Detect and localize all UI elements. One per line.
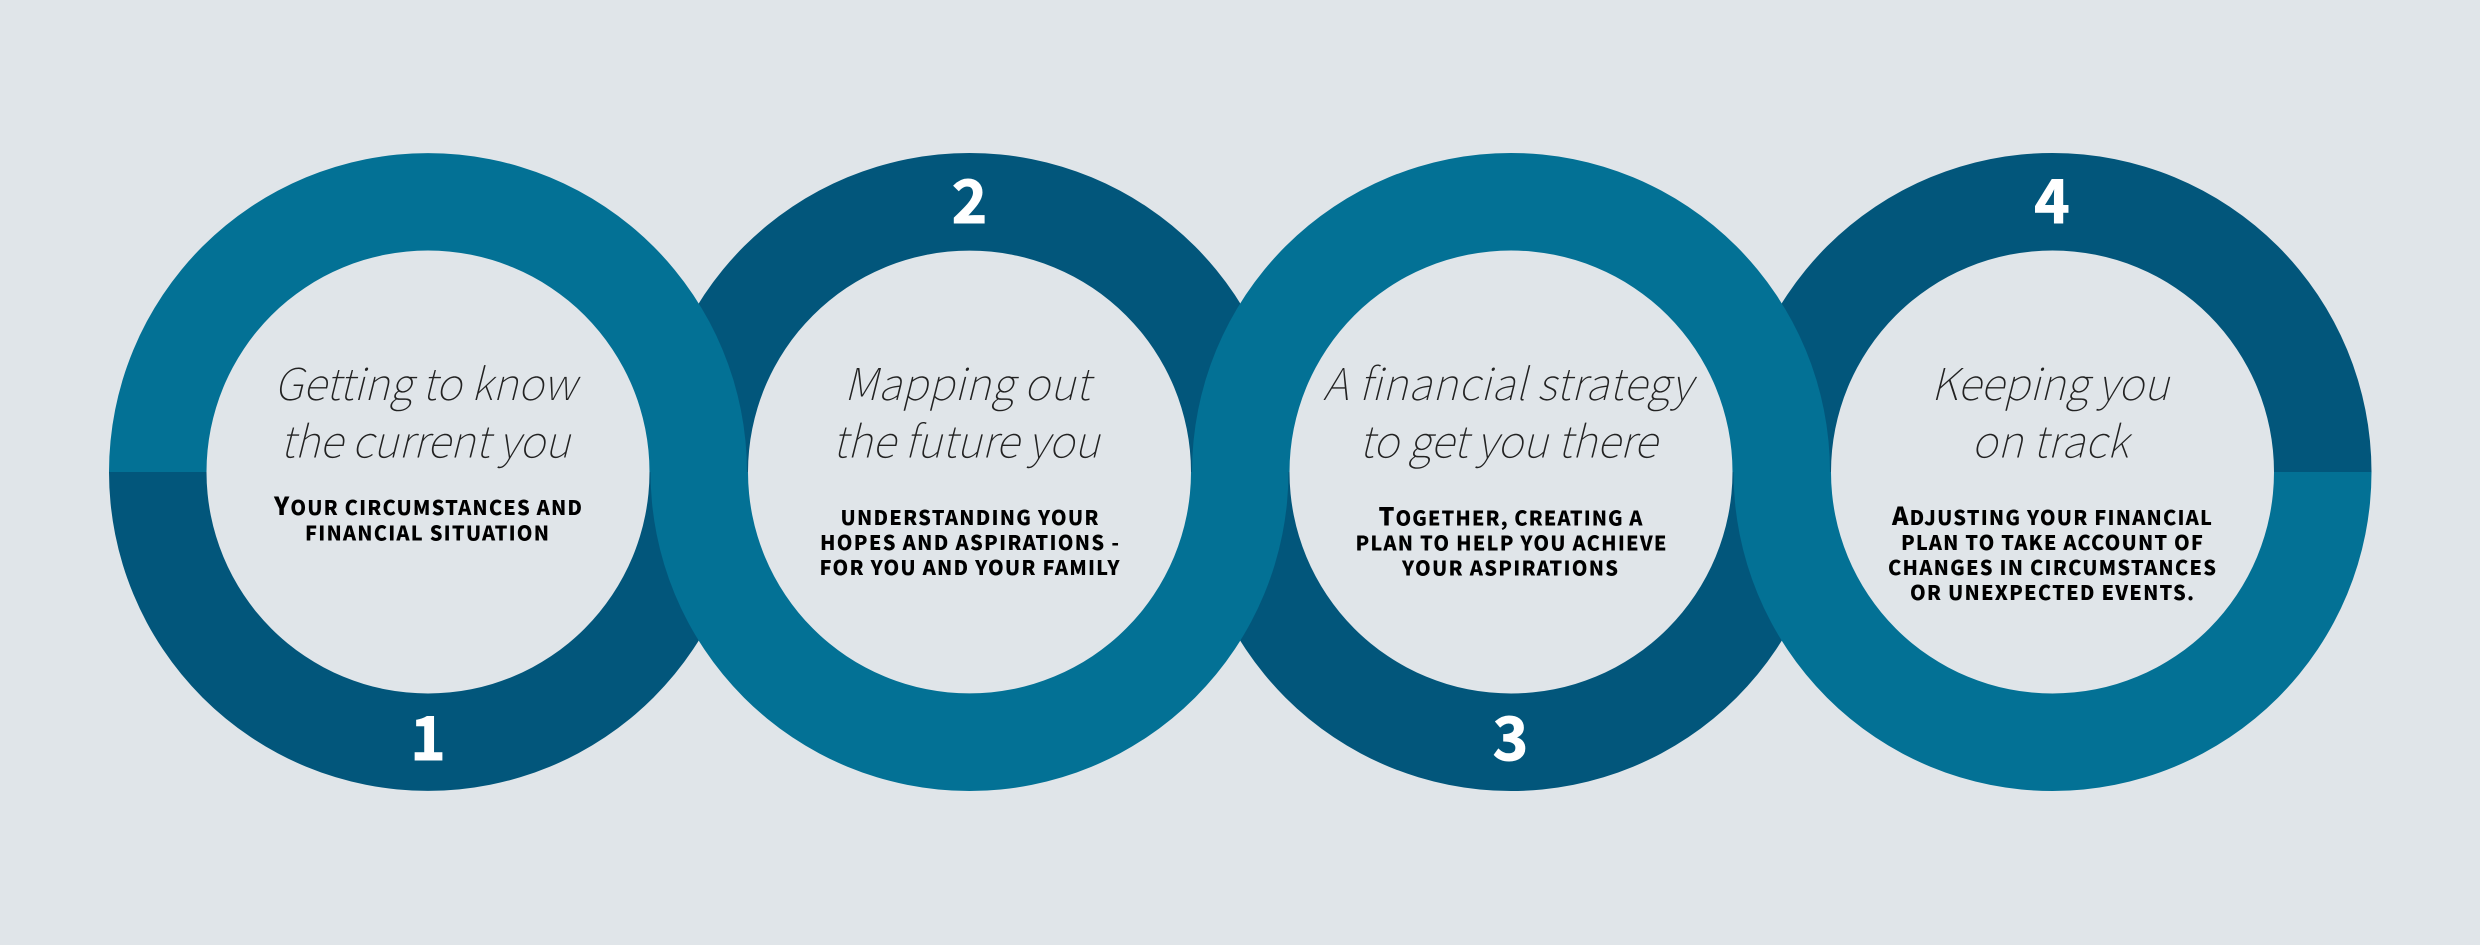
step 2 number: 2 [952, 154, 987, 241]
step 4 [1888, 154, 2216, 606]
step 4 description: OR UNEXPECTED EVENTS. [1910, 577, 2194, 606]
step 4 description: CHANGES IN CIRCUMSTANCES [1888, 552, 2216, 581]
step 3 [1323, 349, 1697, 778]
step 4 heading: on track [1972, 406, 2133, 470]
ring 4 dark upper half [1734, 153, 2372, 472]
step 3 heading [1323, 349, 1697, 470]
ring 3 light upper half [1192, 153, 1830, 472]
step 1 number: 1 [410, 691, 446, 778]
step 2 description [820, 502, 1120, 581]
step 3 description: YOUR ASPIRATIONS [1401, 552, 1618, 582]
step 3 description: TOGETHER, CREATING A [1378, 498, 1643, 534]
interlinked rings [109, 153, 2372, 791]
step 2 heading: Mapping out [844, 349, 1095, 413]
step 1 description [273, 487, 582, 546]
step 3 heading: to get you there [1359, 406, 1661, 470]
ring 1 dark lower half [109, 472, 747, 791]
ring 3 dark lower half [1192, 472, 1830, 791]
step 2 [820, 154, 1120, 581]
step 4 heading: Keeping you [1931, 349, 2171, 413]
step 4 heading [1931, 349, 2171, 470]
step 1 [273, 349, 582, 778]
ring 1 light upper half [109, 153, 747, 472]
step 2 description: FOR YOU AND YOUR FAMILY [820, 552, 1120, 581]
step 2 description: UNDERSTANDING YOUR [840, 502, 1098, 531]
step 3 description: PLAN TO HELP YOU ACHIEVE [1356, 528, 1666, 556]
step 4 description: PLAN TO TAKE ACCOUNT OF [1901, 527, 2203, 556]
step 2 description: HOPES AND ASPIRATIONS - [820, 527, 1119, 556]
ring 2 dark upper half [650, 153, 1288, 472]
step 4 description: ADJUSTING YOUR FINANCIAL [1891, 497, 2212, 533]
step 1 heading [274, 349, 581, 470]
step 3 description [1356, 498, 1666, 582]
step 4 description [1888, 497, 2216, 606]
step 4 number: 4 [2034, 154, 2070, 241]
step 1 description: YOUR CIRCUMSTANCES AND [273, 487, 582, 523]
ring 4 light lower half [1734, 472, 2372, 791]
ring 2 light lower half [650, 472, 1288, 791]
step 1 heading: the current you [280, 406, 572, 470]
step 3 number: 3 [1493, 691, 1528, 778]
step 3 heading: A financial strategy [1323, 349, 1697, 413]
step 2 heading: the future you [832, 406, 1101, 470]
step 1 heading: Getting to know [274, 349, 581, 413]
step 1 description: FINANCIAL SITUATION [305, 518, 549, 546]
step 2 heading [832, 349, 1101, 470]
